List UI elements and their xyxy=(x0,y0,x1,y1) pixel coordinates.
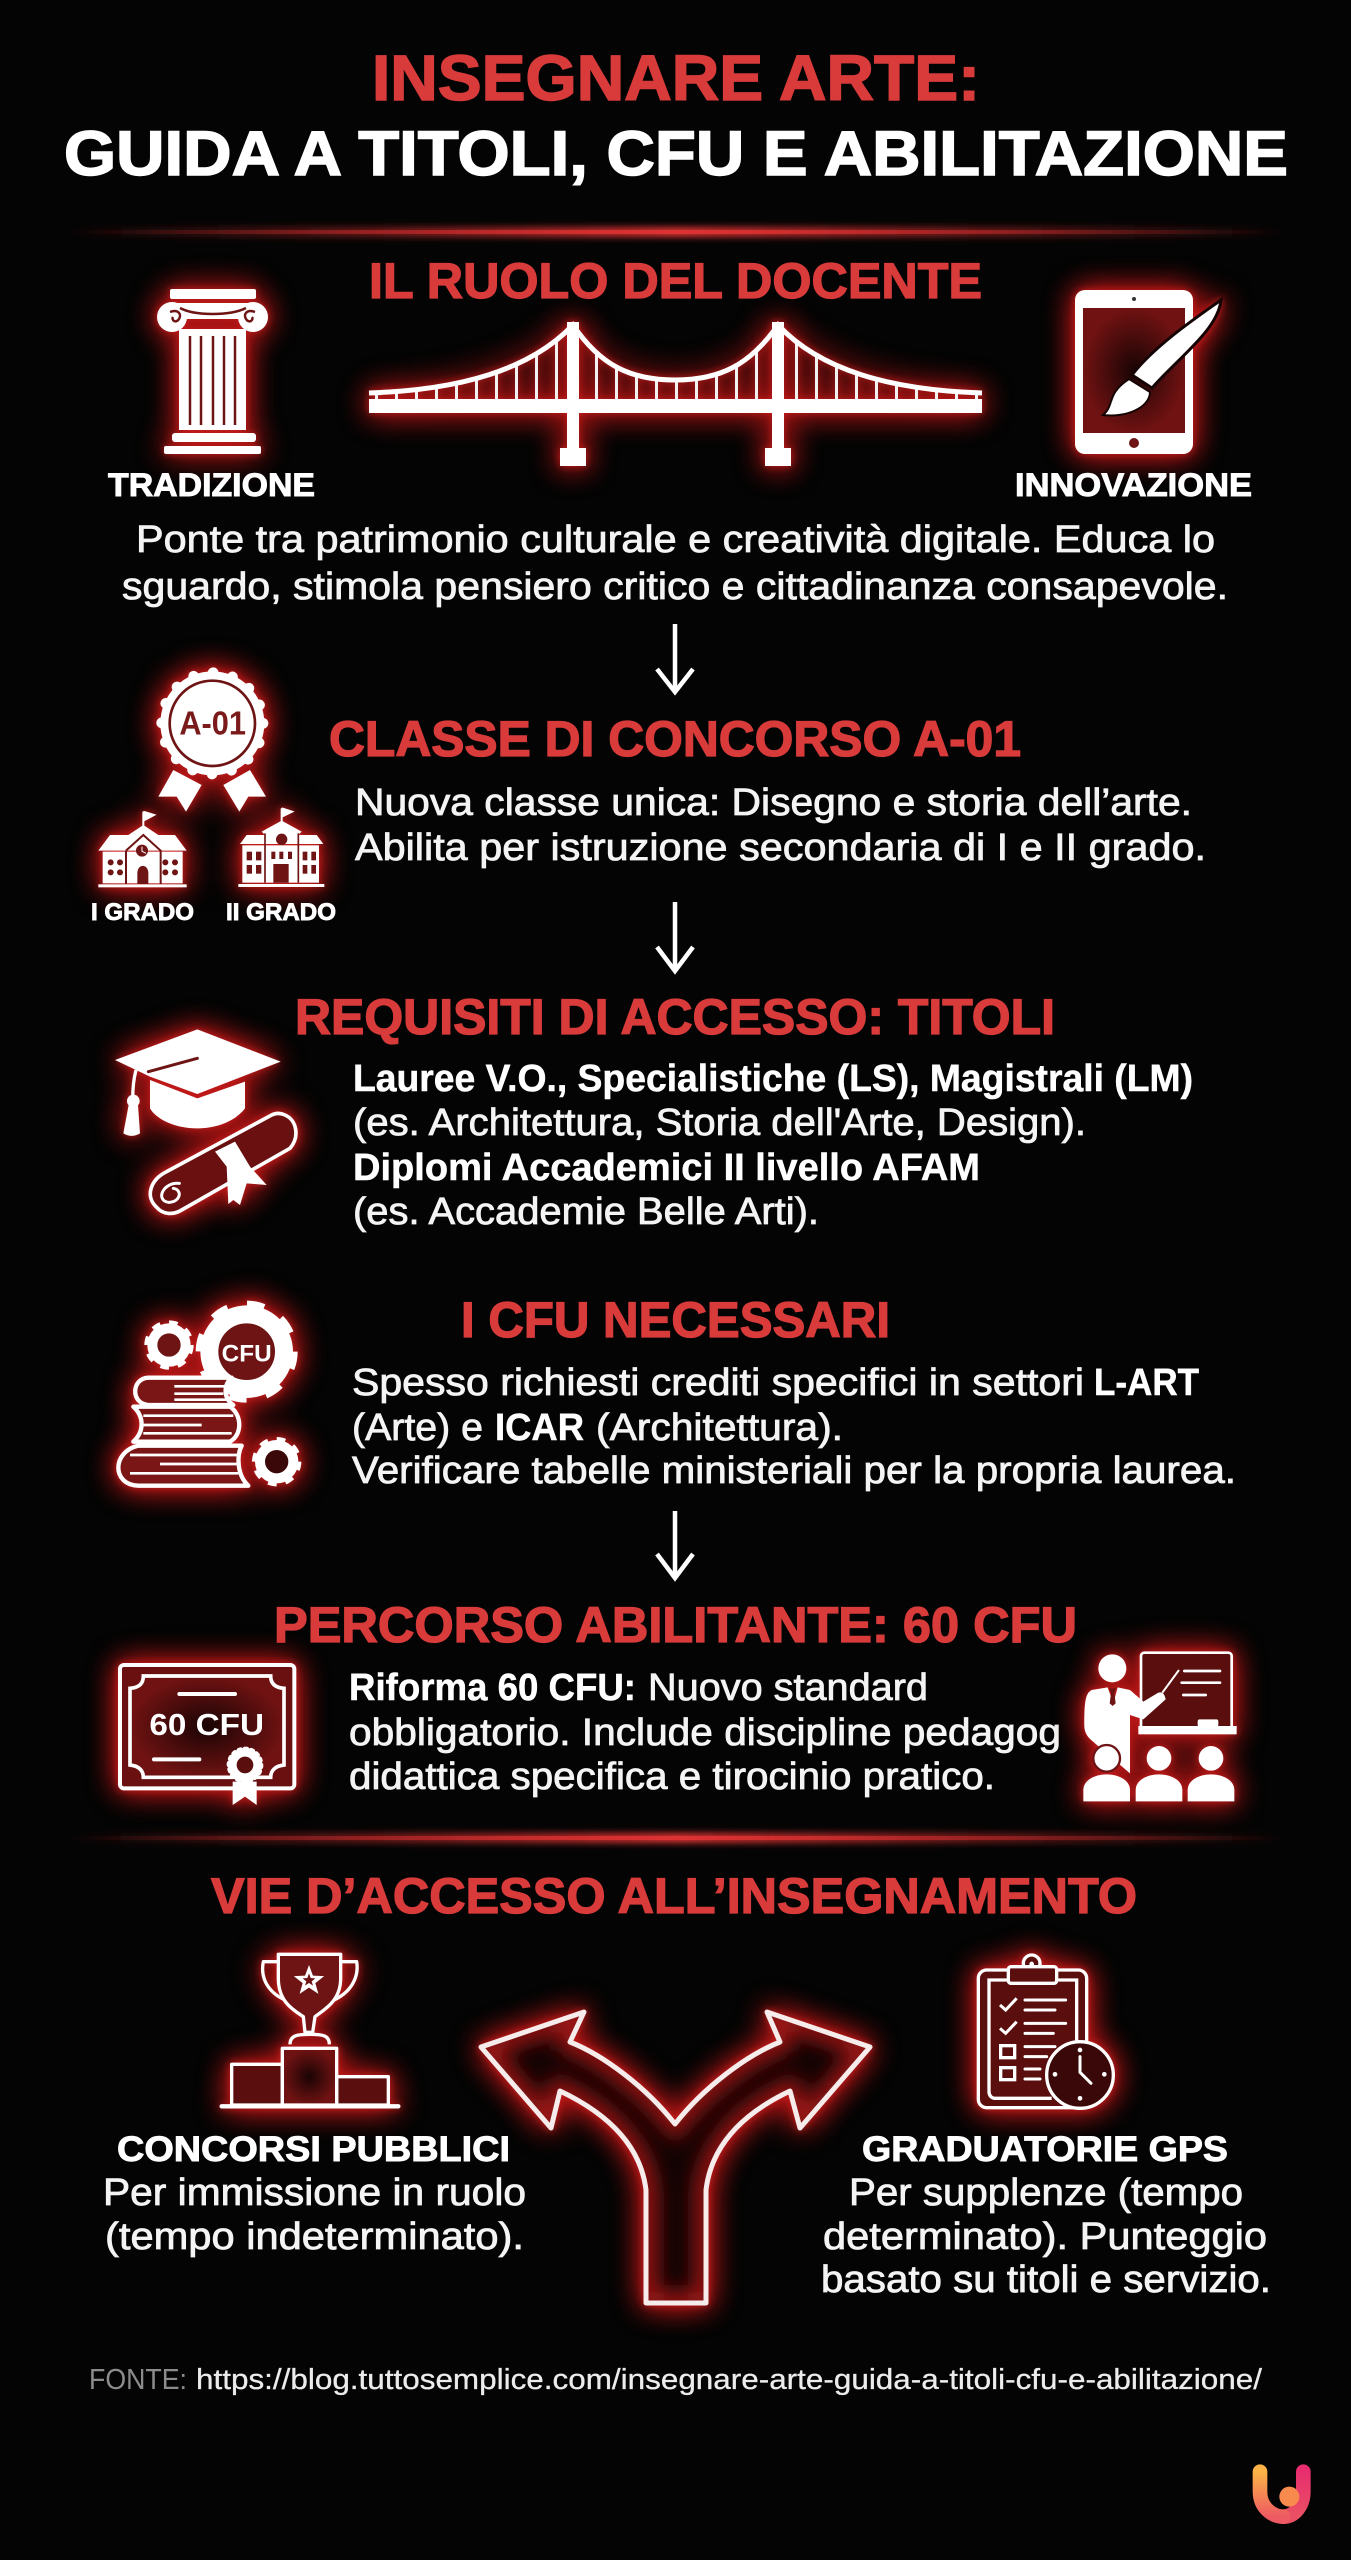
title: GUIDA A TITOLI, CFU E ABILITAZIONE xyxy=(64,119,1288,189)
icon: column xyxy=(157,289,268,454)
heading: classe di concorso: CLASSE DI CONCORSO A-01 xyxy=(329,711,1021,767)
text block: cfu: (Arte) e xyxy=(352,1407,483,1449)
panel: i cfu necessari xyxy=(118,1292,1236,1492)
text block: role description: sguardo, stimola pensiero critico e cittadinanza consapevole. xyxy=(122,566,1228,608)
panel: requisiti di accesso xyxy=(115,989,1193,1233)
icon: teacher and students xyxy=(1083,1653,1237,1801)
heading: requisiti: REQUISITI DI ACCESSO: TITOLI xyxy=(295,989,1055,1045)
heading: il ruolo del docente: IL RUOLO DEL DOCENTE xyxy=(369,253,982,309)
text block: concorsi pubblici: (tempo indeterminato). xyxy=(105,2216,524,2258)
icon: rosette with schools: A-01 xyxy=(179,706,246,743)
text block: graduatorie gps xyxy=(821,2130,1271,2301)
text block: riforma: Nuovo standard xyxy=(648,1667,928,1709)
text block: graduatorie gps: GRADUATORIE GPS xyxy=(862,2130,1228,2169)
icon: books and gears: CFU xyxy=(222,1341,272,1368)
arrow xyxy=(657,1511,693,1578)
text block: graduatorie gps: determinato). Punteggio xyxy=(823,2216,1267,2258)
labels: school grades: I GRADO xyxy=(91,899,194,926)
heading: percorso: PERCORSO ABILITANTE: 60 CFU xyxy=(274,1597,1077,1653)
title xyxy=(64,42,1288,189)
source line: FONTE: xyxy=(89,2364,187,2396)
text block: titoli: (es. Architettura, Storia dell'Arte, Design). xyxy=(353,1102,1086,1144)
text block: classe description xyxy=(355,782,1206,869)
text block: riforma: didattica specifica e tirocinio pratico. xyxy=(349,1756,995,1798)
label: tradizione: TRADIZIONE xyxy=(108,467,315,503)
arrow xyxy=(657,624,693,692)
icon: fork arrow xyxy=(481,2012,870,2303)
panel: percorso abilitante xyxy=(120,1597,1237,1805)
icon: trophy on podium xyxy=(222,1954,398,2106)
panel: il ruolo del docente xyxy=(108,253,1252,608)
text block: graduatorie gps: Per supplenze (tempo xyxy=(849,2172,1243,2214)
text block: riforma: obbligatorio. Include discipline pedagog xyxy=(349,1712,1061,1754)
text block: role description: Ponte tra patrimonio culturale e creatività digitale. Educa lo xyxy=(136,519,1215,561)
icon: certificate xyxy=(120,1665,294,1805)
heading: cfu: I CFU NECESSARI xyxy=(461,1292,890,1348)
text block: riforma: Riforma 60 CFU: xyxy=(349,1667,636,1709)
text block: concorsi pubblici xyxy=(103,2130,526,2258)
text block: cfu: Spesso richiesti crediti specifici in settori xyxy=(352,1362,1084,1404)
text block: cfu xyxy=(352,1362,1236,1492)
icon: tablet and brush xyxy=(1075,290,1221,454)
text block: graduatorie gps: basato su titoli e servizio. xyxy=(821,2259,1271,2301)
text block: cfu: ICAR xyxy=(495,1407,584,1449)
labels: school grades: II GRADO xyxy=(226,899,336,926)
label: innovazione: INNOVAZIONE xyxy=(1015,467,1252,503)
icon: graduation cap and diploma xyxy=(115,1029,296,1213)
icon: books and gears xyxy=(118,1306,298,1486)
text block: cfu: Verificare tabelle ministeriali per la propria laurea. xyxy=(352,1450,1236,1492)
text block: concorsi pubblici: CONCORSI PUBBLICI xyxy=(117,2130,510,2169)
text block: riforma xyxy=(349,1667,1061,1798)
text block: titoli: Lauree V.O., Specialistiche (LS), Magistrali (LM) xyxy=(353,1058,1193,1100)
labels: school grades xyxy=(91,899,336,926)
text block: cfu: (Architettura). xyxy=(596,1407,843,1449)
arrow xyxy=(657,902,693,971)
icon: clipboard and clock xyxy=(978,1955,1113,2108)
heading: vie d'accesso: VIE D’ACCESSO ALL’INSEGNAMENTO xyxy=(211,1868,1137,1924)
icon: bridge xyxy=(369,322,982,466)
text block: classe description: Abilita per istruzione secondaria di I e II grado. xyxy=(355,827,1206,869)
text block: concorsi pubblici: Per immissione in ruolo xyxy=(103,2172,526,2214)
icon: logo xyxy=(1260,2472,1303,2517)
panel: vie d'accesso xyxy=(103,1868,1271,2303)
icon: rosette with schools xyxy=(98,671,324,887)
icon: certificate: 60 CFU xyxy=(149,1708,264,1742)
text block: titoli: Diplomi Accademici II livello AFAM xyxy=(353,1147,980,1189)
text block: titoli: (es. Accademie Belle Arti). xyxy=(353,1191,819,1233)
text block: role description xyxy=(122,519,1228,608)
panel: classe di concorso xyxy=(91,671,1206,926)
text block: classe description: Nuova classe unica: Disegno e storia dell’arte. xyxy=(355,782,1192,824)
source line: https://blog.tuttosemplice.com/insegnare-arte-guida-a-titoli-cfu-e-abilitazione/ xyxy=(196,2364,1263,2396)
title: INSEGNARE ARTE: xyxy=(372,42,980,114)
text block: cfu: L-ART xyxy=(1094,1362,1199,1404)
text block: titoli xyxy=(353,1058,1193,1233)
